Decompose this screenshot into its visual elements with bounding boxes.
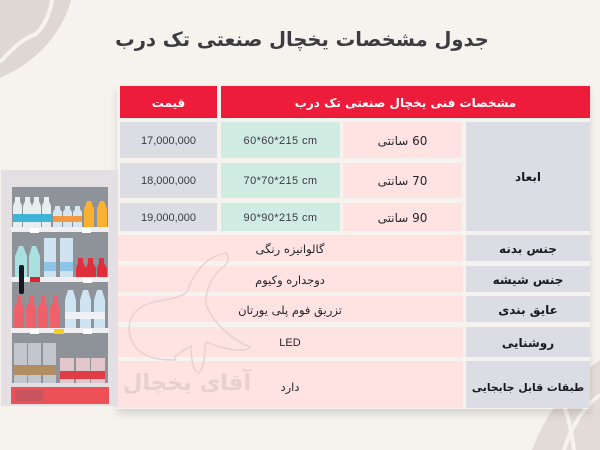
fridge handle [19, 265, 24, 294]
table [117, 86, 590, 409]
body material label [466, 235, 590, 261]
price 70: 18,000,000 [141, 175, 196, 187]
shelf 3 bottles [14, 290, 105, 334]
illustration: fridge [1, 170, 118, 406]
body material value: گالوانیزه رنگی [256, 242, 325, 256]
size 70 [221, 163, 340, 198]
glass label: جنس شیشه [493, 272, 563, 286]
lighting label: روشنایی [502, 336, 554, 350]
glass label [466, 266, 590, 292]
shelf 2 products [15, 238, 107, 283]
insulation label: عایق بندی [498, 302, 558, 316]
decoration: top-left leaf [0, 0, 71, 78]
dimensions label [466, 122, 590, 231]
lighting value [117, 327, 463, 357]
size 90 [221, 203, 340, 231]
spec header [221, 86, 590, 118]
price 90: 19,000,000 [141, 212, 196, 224]
lighting value: LED [279, 336, 301, 348]
insulation value [117, 296, 463, 322]
glass value [117, 266, 463, 292]
fridge cabinet [1, 170, 118, 406]
label 90 [343, 203, 462, 231]
label 60: 60 سانتی [378, 134, 427, 148]
price 70 [120, 163, 217, 198]
title: جدول مشخصات یخچال صنعتی تک درب [115, 28, 489, 51]
label 70 [343, 163, 462, 198]
size 60 [221, 122, 340, 158]
insulation label [466, 296, 590, 322]
label 60 [343, 122, 462, 158]
shelves value: دارد [280, 380, 300, 394]
watermark: brand name: آقای یخچال [123, 370, 251, 396]
spec header: مشخصات فنی یخچال صنعتی تک درب [295, 96, 516, 110]
size 90: 90*90*215 cm [244, 212, 317, 224]
price header [120, 86, 217, 118]
price 90 [120, 203, 217, 231]
shelves label: طبقات قابل جابجایی [472, 380, 584, 394]
label 70: 70 سانتی [378, 174, 427, 188]
shelves label [466, 361, 590, 408]
glass value: دوجداره وکیوم [255, 272, 325, 286]
dimensions label: ابعاد [515, 170, 541, 184]
body material label: جنس بدنه [499, 242, 557, 256]
shelves value [117, 361, 463, 408]
lighting label [466, 327, 590, 357]
size 70: 70*70*215 cm [244, 175, 317, 187]
shelf 1 bottles [13, 197, 107, 233]
shelf 4 cartons [14, 343, 105, 383]
body material value [117, 235, 463, 261]
size 60: 60*60*215 cm [244, 134, 317, 146]
price 60: 17,000,000 [141, 134, 196, 146]
price 60 [120, 122, 217, 158]
watermark: seal logo [128, 252, 251, 374]
price header: قیمت [152, 96, 185, 110]
label 90: 90 سانتی [378, 210, 427, 224]
decoration: bottom-right leaf [532, 360, 600, 450]
insulation value: تزریق فوم پلی یورتان [238, 302, 342, 316]
